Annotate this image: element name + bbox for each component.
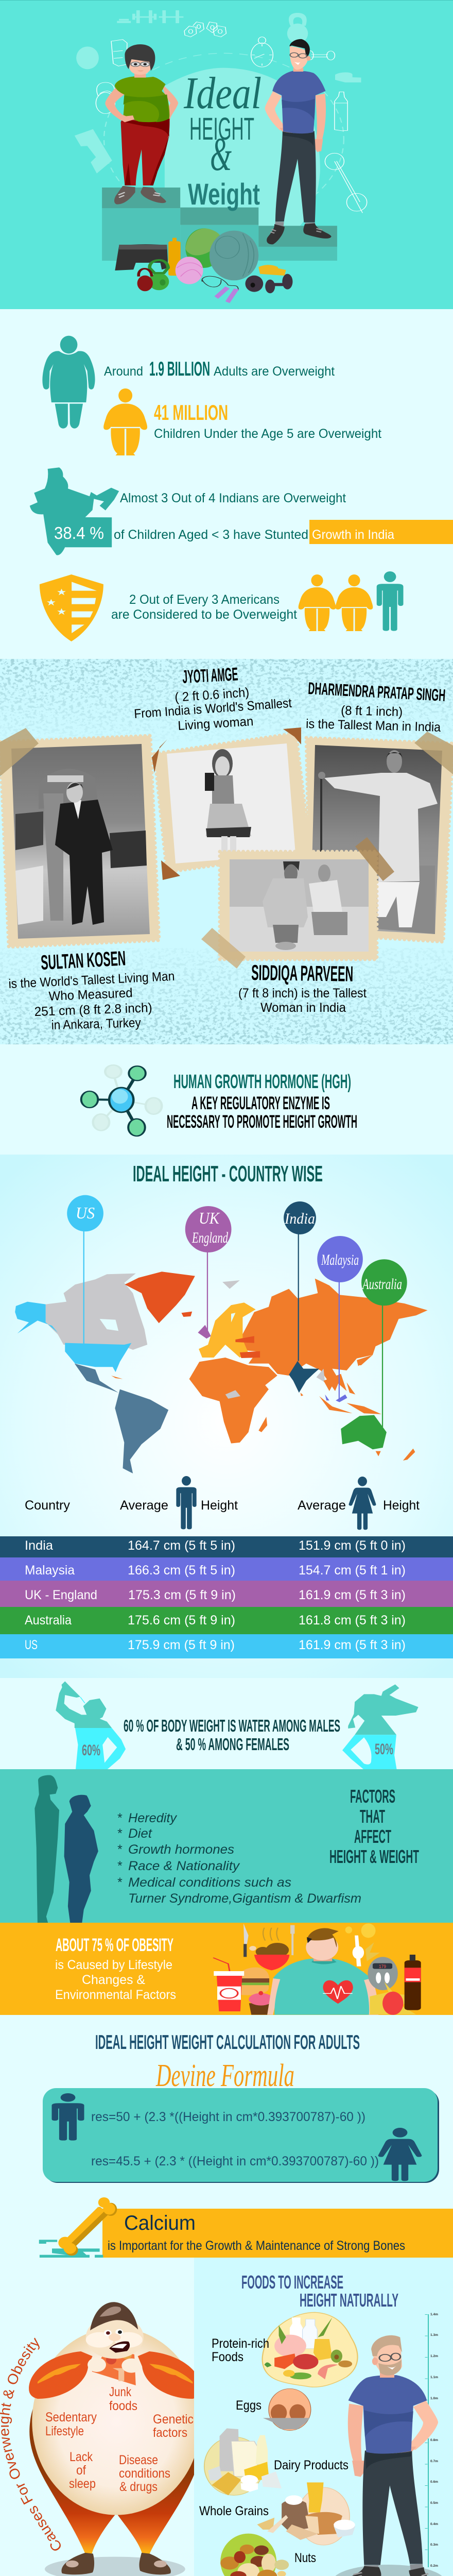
caption: Jyoti Amge: JYOTI AMGE [182,663,238,687]
stat: Americans overweight [111,592,297,622]
table header: Height [201,1498,238,1513]
caption: Jyoti Amge [133,663,292,733]
causes labels: Disease [119,2453,158,2467]
label: eggs: Eggs [236,2398,262,2413]
table header: Height [383,1498,420,1513]
caption: Sultan Kosen: Who Measured [48,986,133,1004]
stat: children overweight: Children Under the Age 5 are Overweight [154,427,381,441]
factors list: Diet [128,1826,152,1841]
stat: adults overweight: Around [104,364,143,379]
panel: factors affecting height and weight [0,1769,453,1939]
height ruler: 0.4m [430,2523,438,2526]
water text: & 50 % AMONG FEMALES [176,1735,289,1754]
table row: UK [0,1581,453,1607]
causes labels: conditions [119,2466,170,2481]
table row: Australia: Australia [25,1613,72,1628]
stat: adults overweight: Adults are Overweight [214,364,335,379]
height ruler: 1.4m [430,2313,438,2316]
causes labels: sleep [69,2477,96,2491]
scale reading: 179 [379,1964,386,1969]
HGH text [167,1071,357,1132]
causes labels: foods [109,2399,137,2413]
calcium banner: Calcium [124,2212,196,2234]
title: Weight [188,178,260,211]
height ruler: 1.2m [430,2355,438,2358]
balloon labels: US [76,1204,95,1222]
character: bearded man [333,2335,445,2576]
label: 50 percent: 50% [375,1741,393,1758]
factors list [117,1811,361,1906]
panel: human growth hormone [0,1044,453,1155]
stat: adults overweight: 1.9 BILLION [149,358,210,380]
caption: Sultan Kosen [8,947,175,1032]
caption: Dharmendra Pratap Singh: is the Tallest Man in India [306,717,441,735]
food plate: eggs [263,2388,311,2431]
caption: Dharmendra Pratap Singh: (8 ft 1 inch) [341,703,403,719]
panel: body water [0,1678,453,1769]
food plate: dairy [204,2428,282,2495]
causes labels: & drugs [119,2480,158,2494]
icon: overweight child [103,388,147,455]
table header: Country [25,1498,70,1513]
table row: UK: 175.3 cm (5 ft 9 in) [128,1588,236,1602]
character: man [265,39,332,244]
character: woman [105,44,178,205]
panel: height record holders [0,659,453,1044]
pale fitness icons [75,10,361,174]
height ruler: 0.2m [430,2565,438,2568]
height ruler: 1.3m [430,2334,438,2337]
icon: male drinking water [56,1681,126,1769]
label: 60 percent: 60% [82,1742,100,1759]
table row: Australia [0,1607,453,1634]
label: protein-rich foods: Protein-rich [212,2336,269,2351]
photo frame: Siddiqa Parveen [220,852,377,959]
factors list: * [117,1875,123,1890]
balloon labels: UK [199,1209,220,1227]
causes labels [45,2385,194,2494]
factors list: Growth hormones [128,1842,234,1857]
icon: US shield [40,574,103,641]
obesity text [55,1935,176,2002]
photo frame: Sultan Kosen [0,736,159,947]
caption: Jyoti Amge: ( 2 ft 0.6 inch) [174,685,250,705]
stat: stunted growth: 38.4 % [54,523,104,543]
factors list: * [117,1842,123,1857]
table row: India: 151.9 cm (5 ft 0 in) [299,1538,406,1553]
stat: stunted growth: Growth in India [312,528,394,542]
food plate: nuts [220,2534,289,2576]
caption: Siddiqa Parveen [238,960,367,1015]
icon: female drinking water [342,1684,419,1769]
causes labels: Lifestyle [45,2424,84,2438]
factors heading: THAT [360,1806,385,1827]
food plate: whole grains [257,2482,355,2545]
height ruler: 0.8m [430,2439,438,2442]
caption: Jyoti Amge: From India is World's Smallest [133,696,292,721]
table row: Malaysia: 166.3 cm (5 ft 5 in) [128,1563,235,1578]
causes labels: Sedentary [45,2410,97,2425]
tapes on frames [0,728,453,969]
causes labels: factors [153,2426,187,2440]
balloon pins [67,1195,407,1427]
causes labels: of [76,2463,86,2478]
table header: Average [298,1498,346,1513]
stat: stunted growth [54,520,453,544]
heading [241,2272,398,2311]
icon: molecule [81,1065,162,1136]
label: protein-rich foods: Foods [212,2350,243,2364]
caption: Sultan Kosen: is the World's Tallest Living Man [8,969,175,991]
factors list: * [117,1859,123,1873]
height ruler: 1.1m [430,2376,438,2379]
table header: Average [120,1498,168,1513]
stat: children overweight: 41 MILLION [154,400,228,425]
table header [25,1476,420,1530]
panel: hero [0,0,453,309]
obesity text: is Caused by Lifestyle [55,1958,172,1972]
caption: Jyoti Amge: Living woman [178,714,254,733]
table row: UK: UK - England [25,1588,97,1602]
panel: obesity statistics [0,309,453,659]
hero background arch and steps [102,53,344,261]
label: whole grains: Whole Grains [199,2504,269,2518]
height ruler: 0.5m [430,2502,438,2505]
height ruler [426,2313,438,2568]
label: nuts: Nuts [294,2551,316,2565]
factors heading [329,1786,419,1867]
table row: US: 175.9 cm (5 ft 9 in) [128,1638,235,1652]
height ruler: 0.6m [430,2481,438,2484]
table row: UK: 161.9 cm (5 ft 3 in) [299,1588,406,1602]
illustration: overweight man with junk food [213,1923,421,2015]
stat: Indians overweight: Almost 3 Out of 4 Indians are Overweight [120,491,346,505]
white outline fitness icons [96,22,367,213]
factors list: * [117,1811,123,1825]
panel: ideal height country wise [0,1155,453,1678]
stat: Americans overweight: 2 Out of Every 3 Americans [129,592,280,607]
table row: India: 164.7 cm (5 ft 5 in) [128,1538,235,1553]
panel: causes for overweight [0,2258,194,2576]
panel: formula [0,2015,453,2258]
label: dairy products: Dairy Products [274,2458,349,2472]
caption: Siddiqa Parveen: Woman in India [260,1001,346,1015]
causes labels: Genetic [153,2412,194,2427]
stat: stunted growth: of Children Aged < 3 have Stunted [114,528,308,542]
balloon labels [76,1204,402,1293]
world map [15,1272,428,1473]
factors list: Race & Nationality [128,1859,240,1873]
caption: Sultan Kosen: 251 cm (8 ft 2.8 inch) [34,1001,152,1019]
balloon labels: Malaysia [321,1251,359,1268]
formula box: res=45.5 + (2.3 * ((Height in cm*0.393700787)-60 )) [91,2154,379,2168]
icon: India map [30,467,119,555]
factors heading: AFFECT [354,1826,391,1847]
food plate: protein [263,2312,358,2387]
causes labels: Junk [109,2385,131,2399]
balloon labels: India [284,1210,315,1227]
obesity text: ABOUT 75 % OF OBESITY [56,1935,173,1955]
icon: silhouettes [34,1775,98,1939]
factors list: Heredity [128,1811,178,1825]
obesity text: Environmental Factors [55,1988,176,2002]
panel: foods to increase height [194,2258,453,2576]
table row: Malaysia: Malaysia [25,1563,75,1578]
table row: Malaysia [0,1557,453,1581]
factors list: * [117,1826,123,1841]
table row: US: US [25,1638,38,1652]
balloon labels: Australia [362,1276,402,1293]
photo frame: Jyoti Amge [152,727,310,880]
title: HEIGHT [189,111,254,146]
heading: FOODS TO INCREASE [241,2272,343,2293]
title: & [210,128,232,180]
panel: obesity causes lifestyle [0,1923,453,2015]
height ruler: 0.3m [430,2544,438,2547]
height ruler: 1.0m [430,2397,438,2400]
height ruler: 0.7m [430,2460,438,2463]
obesity text: Changes & [82,1973,145,1987]
title [183,69,262,211]
calcium banner: is Important for the Growth & Maintenance of Strong Bones [108,2239,405,2253]
stat: Americans overweight: are Considered to be Overweight [111,607,297,622]
formula box: res=50 + (2.3 *((Height in cm*0.393700787)-60 )) [91,2110,365,2124]
calcium banner [39,2197,453,2258]
causes labels: Lack [69,2450,93,2464]
balloon labels: England [191,1229,229,1246]
label: protein-rich foods [212,2336,269,2364]
icon: overweight adult [42,336,95,429]
title: Ideal [183,69,262,118]
stat: children overweight [154,400,381,441]
Devine Formula title: Devine Formula [155,2058,294,2093]
caption: Siddiqa Parveen: SIDDIQA PARVEEN [251,960,354,986]
factors heading: FACTORS [350,1786,395,1807]
caption: Siddiqa Parveen: (7 ft 8 inch) is the Tallest [238,986,367,1001]
table row: US: 161.9 cm (5 ft 3 in) [299,1638,406,1652]
water text [124,1716,340,1754]
factors list: Turner Syndrome,Gigantism & Dwarfism [128,1891,361,1906]
fitness equipment [115,228,292,303]
photo frame: Dharmendra Pratap Singh [306,738,453,942]
table row: India: India [25,1538,53,1553]
table row: Australia: 175.6 cm (5 ft 9 in) [128,1613,235,1628]
illustration: overweight boy eating pizza [29,2302,204,2576]
caption: Sultan Kosen: in Ankara, Turkey [51,1015,142,1032]
table row: India [0,1536,453,1557]
stat: adults overweight [104,358,335,380]
table row: Australia: 161.8 cm (5 ft 3 in) [299,1613,406,1628]
caption: Sultan Kosen: SULTAN KOSEN [40,947,126,974]
formula box [43,2088,439,2183]
factors list: Medical conditions such as [128,1875,291,1890]
icon: three people [299,571,404,631]
table row: US [0,1634,453,1658]
caption: Dharmendra Pratap Singh [306,679,446,735]
table row: Malaysia: 154.7 cm (5 ft 1 in) [299,1563,406,1578]
